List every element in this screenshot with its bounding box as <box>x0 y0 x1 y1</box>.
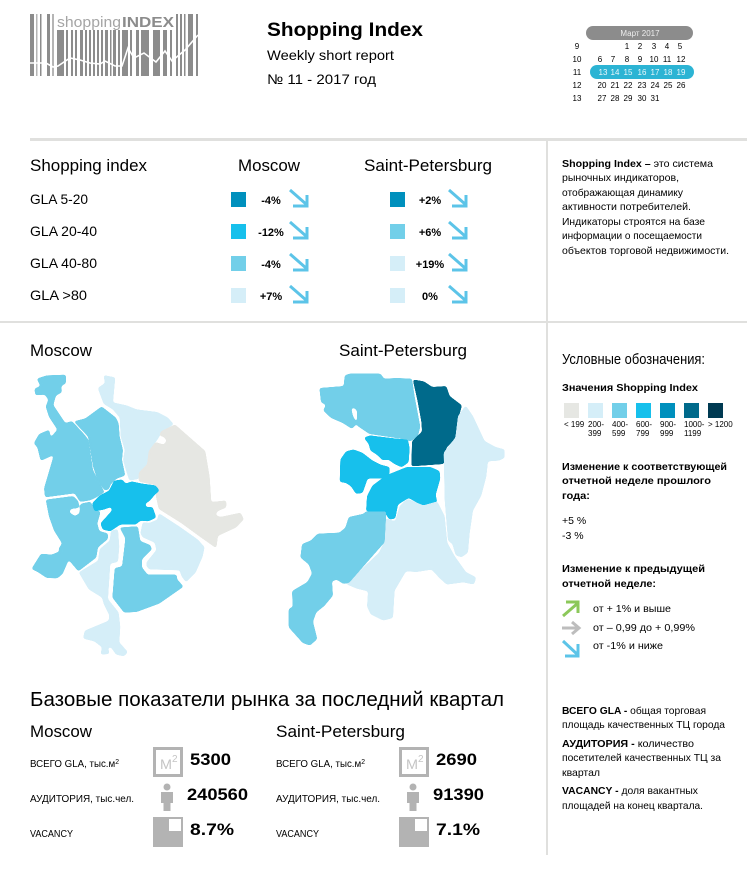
calendar: 7 <box>611 55 616 64</box>
colour scale: < 199 <box>564 420 585 429</box>
labels <box>30 759 134 840</box>
text block: shopping index description: объектов торговой недвижимости. <box>562 245 729 257</box>
district: center south <box>366 467 440 520</box>
labels: ВСЕГО GLA, тыс.м <box>276 759 364 770</box>
calendar: 21 <box>611 81 620 90</box>
calendar: 8 <box>625 55 630 64</box>
labels <box>276 759 380 840</box>
saint-petersburg arrows <box>449 190 466 302</box>
table headings: Shopping index <box>30 156 147 175</box>
calendar: 30 <box>638 94 647 103</box>
map: saint-petersburg <box>289 374 505 646</box>
district: south <box>346 499 476 621</box>
values: 240560 <box>187 785 248 804</box>
saint-petersburg values: 0% <box>422 291 438 303</box>
calendar: 19 <box>677 68 686 77</box>
text block: definitions: посетителей качественных ТЦ за <box>562 752 721 764</box>
labels: 2 <box>115 759 119 766</box>
saint-petersburg swatches <box>390 192 405 303</box>
title block: № 11 - 2017 год <box>267 71 376 87</box>
saint-petersburg values: +6% <box>419 227 441 239</box>
values: 7.1% <box>436 820 480 839</box>
calendar: 3 <box>652 42 657 51</box>
week-on-week change: от – 0,99 до + 0,99% <box>593 622 695 634</box>
calendar: 17 <box>651 68 660 77</box>
icon: square metres <box>400 748 428 776</box>
calendar: 14 <box>611 68 620 77</box>
text block: definitions: квартал <box>562 767 600 779</box>
week-on-week change: от + 1% и выше <box>593 603 671 615</box>
year-on-year change: -3 % <box>562 530 584 542</box>
calendar: 24 <box>651 81 660 90</box>
moscow values <box>258 195 284 303</box>
row labels: GLA 5-20 <box>30 191 88 207</box>
text block: shopping index description: Shopping Index – это система <box>562 158 713 170</box>
moscow swatches <box>231 192 246 303</box>
table headings <box>30 156 492 175</box>
calendar: 26 <box>677 81 686 90</box>
moscow arrows <box>290 190 307 302</box>
icon: square metres: М <box>406 756 418 772</box>
legend heading: Условные обозначения: <box>562 351 705 368</box>
panel: saint-petersburg indicators <box>276 722 484 847</box>
district: south-west <box>289 511 386 646</box>
row labels: GLA 40-80 <box>30 255 97 271</box>
text block: shopping index description: рыночных индикаторов, <box>562 172 679 184</box>
calendar: 13 <box>599 68 608 77</box>
labels: ВСЕГО GLA, тыс.м <box>30 759 118 770</box>
table headings: Saint-Petersburg <box>364 156 492 175</box>
calendar: 13 <box>573 94 582 103</box>
calendar: 27 <box>598 94 607 103</box>
panel: legend <box>562 351 733 656</box>
week-on-week change: отчетной неделе: <box>562 578 656 590</box>
icon: square metres: 2 <box>418 754 424 765</box>
heading: market indicators: Базовые показатели рынка за последний квартал <box>30 689 504 711</box>
labels: АУДИТОРИЯ, тыс.чел. <box>30 794 134 805</box>
icon: square metres: 2 <box>172 754 178 765</box>
colour scale: 1000- <box>684 420 705 429</box>
calendar: 18 <box>664 68 673 77</box>
map: moscow <box>31 375 244 656</box>
text block: definitions: площадей на конец квартала. <box>562 800 703 812</box>
values: 5300 <box>190 750 231 769</box>
row labels <box>30 191 97 303</box>
moscow values: -4% <box>261 259 281 271</box>
calendar: 16 <box>638 68 647 77</box>
district: west <box>34 375 105 502</box>
title block: Shopping Index <box>267 20 423 41</box>
saint-petersburg values: +19% <box>416 259 444 271</box>
values: 2690 <box>436 750 477 769</box>
calendar: 9 <box>575 42 580 51</box>
heading: saint-petersburg map: Saint-Petersburg <box>339 341 467 360</box>
text block: definitions <box>562 705 725 812</box>
calendar: 25 <box>664 81 673 90</box>
row labels: GLA 20-40 <box>30 223 97 239</box>
colour scale: > 1200 <box>708 420 733 429</box>
colour scale: 399 <box>588 429 602 438</box>
year-on-year change: отчетной неделе прошлого <box>562 475 711 487</box>
calendar: 2 <box>638 42 643 51</box>
colour scale: 600- <box>636 420 652 429</box>
district: east <box>444 405 505 557</box>
year-on-year change: +5 % <box>562 515 586 527</box>
moscow values: -4% <box>261 195 281 207</box>
text block: definitions: ВСЕГО GLA - общая торговая <box>562 705 706 717</box>
calendar: 11 <box>663 55 672 64</box>
text block: definitions: АУДИТОРИЯ - количество <box>562 738 694 750</box>
calendar: 1 <box>625 42 630 51</box>
district: east <box>139 424 244 548</box>
district: north-west <box>74 406 125 491</box>
logo: shopping index barcode: INDEX <box>122 15 174 31</box>
calendar: 12 <box>677 55 686 64</box>
text block: definitions: VACANCY - доля вакантных <box>562 785 699 797</box>
colour scale: 200- <box>588 420 604 429</box>
colour scale: 1199 <box>684 429 702 438</box>
colour scale: 900- <box>660 420 676 429</box>
calendar: 10 <box>650 55 659 64</box>
logo: shopping index barcode <box>30 14 198 76</box>
title block: Weekly short report <box>267 47 394 63</box>
panel: shopping index table <box>30 156 492 303</box>
labels: VACANCY <box>276 829 319 840</box>
colour scale: 400- <box>612 420 628 429</box>
calendar: 28 <box>611 94 620 103</box>
district: west <box>340 449 390 494</box>
district: south-west tail <box>79 529 128 656</box>
icon: vacancy <box>399 817 429 847</box>
calendar: Март 2017 <box>620 29 660 38</box>
year-on-year change: года: <box>562 490 590 502</box>
text block: shopping index description: Индикаторы строятся на базе <box>562 216 705 228</box>
values <box>433 750 484 839</box>
text block: definitions: площадь качественных ТЦ города <box>562 719 725 731</box>
colour scale <box>564 403 733 438</box>
table headings: Moscow <box>238 156 301 175</box>
logo: shopping index barcode: shopping <box>57 15 121 31</box>
colour scale: 799 <box>636 429 650 438</box>
heading: moscow map: Moscow <box>30 341 93 360</box>
colour scale heading: Значения Shopping Index <box>562 382 698 394</box>
icon: person <box>407 784 419 811</box>
title block <box>267 20 423 87</box>
saint-petersburg heading: Saint-Petersburg <box>276 722 405 741</box>
calendar: 9 <box>638 55 643 64</box>
values: 8.7% <box>190 820 234 839</box>
values: 91390 <box>433 785 484 804</box>
moscow values: -12% <box>258 227 284 239</box>
saint-petersburg values <box>416 195 444 303</box>
moscow values: +7% <box>260 291 282 303</box>
calendar: 10 <box>573 55 582 64</box>
week-on-week change: Изменение к предыдущей <box>562 563 705 575</box>
text block: shopping index description <box>562 158 729 257</box>
district: south-west <box>31 496 108 578</box>
district: center north <box>364 435 410 467</box>
calendar: 22 <box>624 81 633 90</box>
district: south <box>112 526 184 613</box>
calendar: 6 <box>598 55 603 64</box>
saint-petersburg values: +2% <box>419 195 441 207</box>
values <box>187 750 248 839</box>
labels: VACANCY <box>30 829 73 840</box>
calendar: 12 <box>573 81 582 90</box>
district: north <box>98 375 174 481</box>
district: south-east <box>140 513 205 582</box>
panel: moscow indicators <box>30 722 248 847</box>
calendar <box>573 26 694 103</box>
calendar: 15 <box>624 68 633 77</box>
calendar: 20 <box>598 81 607 90</box>
icon: person <box>161 784 173 811</box>
labels: 2 <box>361 759 365 766</box>
colour scale: 999 <box>660 429 674 438</box>
calendar: 4 <box>665 42 670 51</box>
calendar: 5 <box>678 42 683 51</box>
icon: square metres <box>154 748 182 776</box>
week-on-week change <box>562 563 705 656</box>
text block: shopping index description: активности потребителей. <box>562 201 691 213</box>
colour scale: 599 <box>612 429 626 438</box>
year-on-year change <box>562 461 727 542</box>
week-on-week change: от -1% и ниже <box>593 640 663 652</box>
moscow heading: Moscow <box>30 722 93 741</box>
calendar: 31 <box>651 94 660 103</box>
district: north-east <box>411 379 462 466</box>
text block: shopping index description: отображающая динамику <box>562 187 684 199</box>
district: north <box>319 374 420 441</box>
icon: square metres: М <box>160 756 172 772</box>
district: center <box>92 479 160 531</box>
year-on-year change: Изменение к соответствующей <box>562 461 727 473</box>
calendar: 29 <box>624 94 633 103</box>
labels: АУДИТОРИЯ, тыс.чел. <box>276 794 380 805</box>
icon: vacancy <box>153 817 183 847</box>
text block: shopping index description: информации о посещаемости <box>562 230 702 242</box>
calendar: 23 <box>638 81 647 90</box>
row labels: GLA >80 <box>30 287 87 303</box>
calendar: 11 <box>573 68 582 77</box>
